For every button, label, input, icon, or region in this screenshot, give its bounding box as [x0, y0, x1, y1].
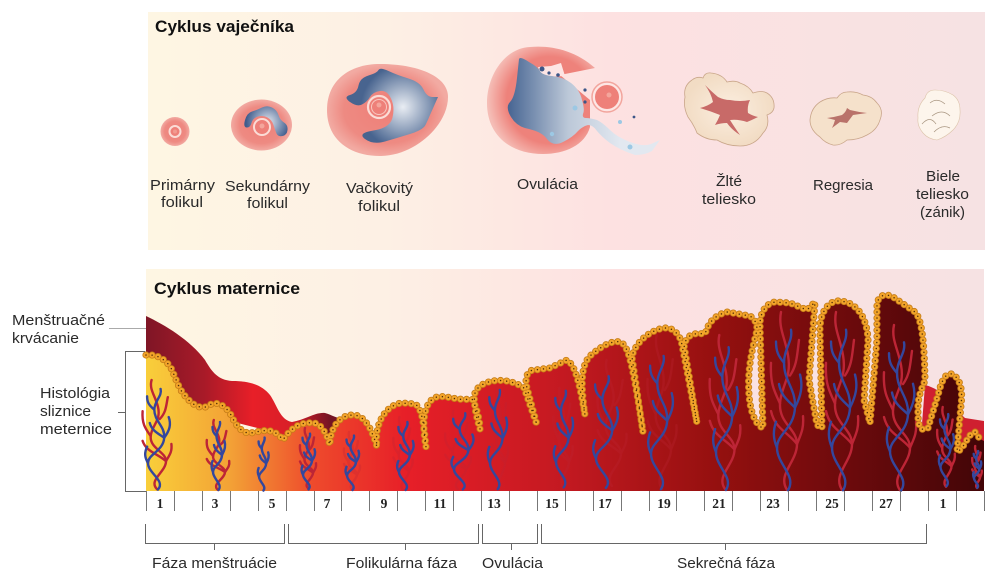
day numbers: 1 — [157, 496, 164, 511]
epithelium cells — [146, 295, 980, 452]
primary follicle: Primárny — [150, 177, 216, 194]
corpus albicans: Biele — [926, 168, 960, 185]
day axis ticks — [146, 491, 984, 511]
late cycle blood layer — [920, 385, 984, 450]
vesicular follicle — [327, 64, 448, 215]
corpus albicans: (zánik) — [920, 204, 965, 221]
label: endometrial histology: Histológia — [40, 385, 111, 402]
day numbers: 17 — [598, 496, 612, 511]
heading: uterine cycle: Cyklus maternice — [154, 279, 300, 298]
label: menstrual bleeding: Menštruačné — [12, 312, 105, 329]
day numbers: 25 — [825, 496, 839, 511]
day numbers: 3 — [212, 496, 219, 511]
label: endometrial histology — [40, 352, 146, 492]
secondary follicle: Sekundárny — [225, 178, 311, 195]
ovulation: Ovulácia — [517, 176, 579, 193]
vesicular follicle: Vačkovitý — [346, 180, 414, 197]
heading: ovarian cycle: Cyklus vaječníka — [155, 17, 295, 36]
phase: follicular — [288, 524, 478, 572]
phase: ovulation — [482, 524, 544, 572]
day numbers: 27 — [879, 496, 893, 511]
day numbers: 5 — [269, 496, 276, 511]
corpus albicans — [916, 90, 969, 221]
panel: ovarian cycle — [148, 12, 985, 250]
corpus albicans: teliesko — [916, 186, 969, 203]
label: menstrual bleeding: krvácanie — [12, 330, 79, 347]
day numbers: 9 — [381, 496, 388, 511]
day numbers: 1 — [940, 496, 947, 511]
primary follicle — [150, 117, 216, 211]
day numbers: 7 — [324, 496, 331, 511]
panel: uterine cycle — [142, 269, 985, 511]
secondary follicle: folikul — [247, 195, 288, 212]
phase: follicular: Folikulárna fáza — [346, 555, 458, 572]
menstrual blood layer — [146, 316, 345, 450]
phase: menstruation: Fáza menštruácie — [152, 555, 277, 572]
phase: menstruation — [146, 524, 284, 572]
vesicular follicle: folikul — [358, 198, 400, 215]
label: menstrual bleeding — [12, 312, 146, 347]
blood vessels — [142, 312, 982, 491]
day numbers: 23 — [766, 496, 780, 511]
ovulation — [487, 47, 660, 193]
label: endometrial histology: sliznice — [40, 403, 91, 420]
phase: secretory — [542, 524, 926, 572]
regression: Regresia — [813, 177, 874, 194]
phase: secretory: Sekrečná fáza — [677, 555, 776, 572]
day numbers: 15 — [545, 496, 559, 511]
corpus luteum: teliesko — [702, 191, 756, 208]
label: endometrial histology: meternice — [40, 421, 112, 438]
primary follicle: folikul — [161, 194, 203, 211]
day numbers: 19 — [657, 496, 671, 511]
corpus luteum: Žlté — [716, 173, 742, 190]
day numbers: 11 — [434, 496, 447, 511]
corpus luteum — [684, 73, 774, 208]
day numbers: 13 — [487, 496, 501, 511]
regression — [810, 92, 881, 194]
secondary follicle — [225, 100, 311, 212]
endometrium tissue — [146, 295, 984, 491]
phase: ovulation: Ovulácia — [482, 555, 544, 572]
day numbers — [157, 496, 947, 511]
day numbers: 21 — [712, 496, 726, 511]
